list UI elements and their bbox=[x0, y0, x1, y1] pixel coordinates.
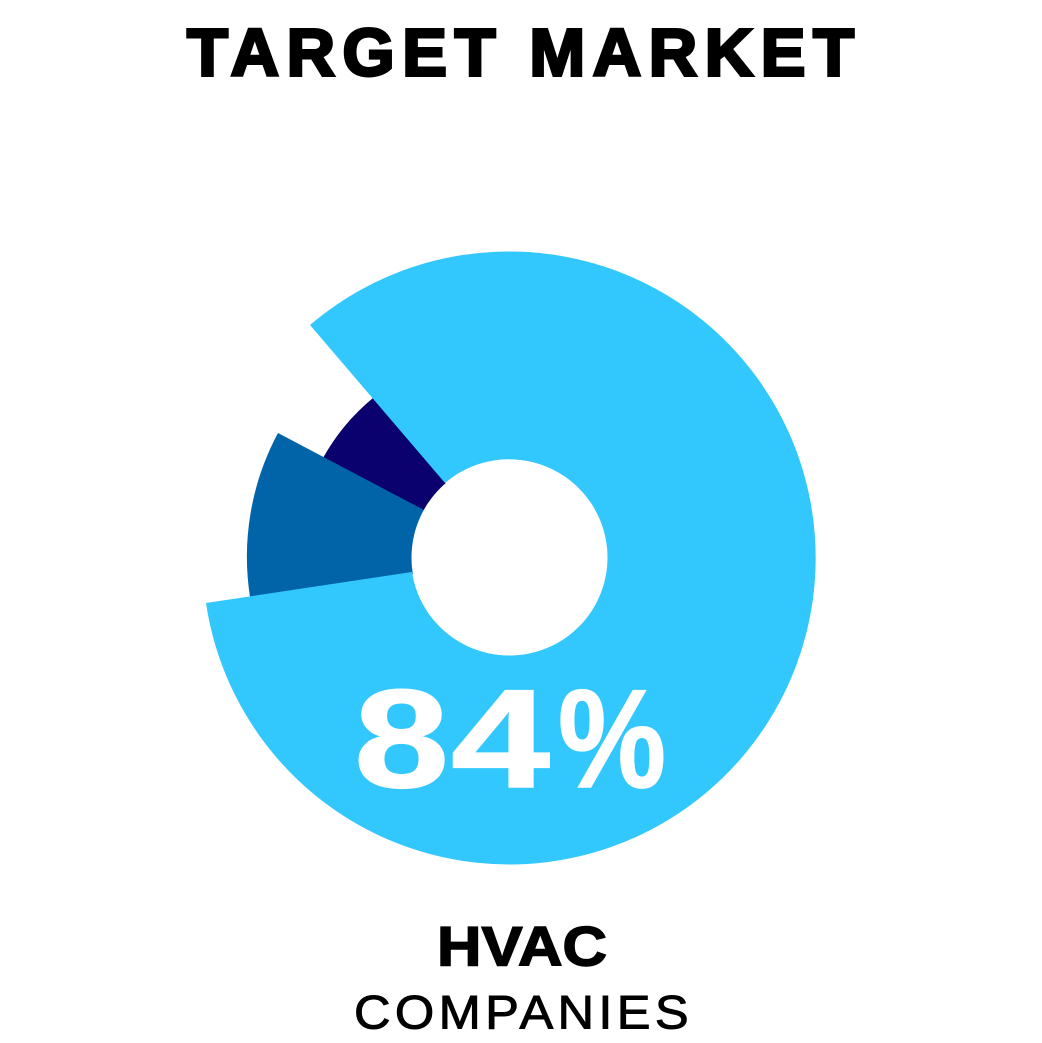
percentage value: 4 bbox=[451, 660, 550, 817]
slice: dark navy bbox=[323, 398, 450, 515]
label: companies: COMPANIES bbox=[354, 986, 693, 1038]
percentage value: % bbox=[558, 660, 666, 817]
slice: medium blue bbox=[247, 433, 430, 597]
inner hole bbox=[412, 460, 608, 656]
donut chart bbox=[206, 251, 816, 864]
label: HVAC: HVAC bbox=[437, 914, 607, 978]
percentage value bbox=[354, 660, 666, 817]
title: TARGET MARKET bbox=[187, 16, 854, 90]
percentage value: 8 bbox=[354, 660, 449, 817]
slice: HVAC companies 84% bbox=[206, 251, 816, 864]
